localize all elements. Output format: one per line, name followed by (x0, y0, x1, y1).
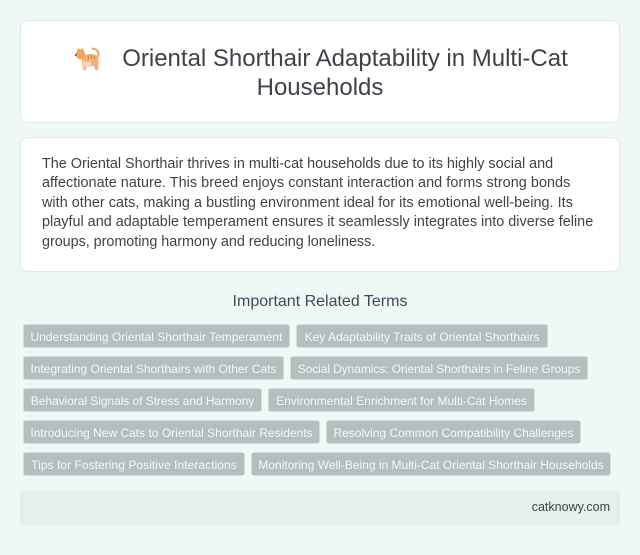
tags: related terms: Introducing New Cats to Oriental Shorthair Residents (30, 426, 313, 440)
tags: related terms: Understanding Oriental Shorthair Temperament (31, 330, 282, 344)
footer (20, 491, 620, 525)
text block: description: groups, promoting harmony and reducing loneliness. (42, 234, 375, 250)
panel: description (20, 137, 620, 272)
text block: description: The Oriental Shorthair thrives in multi-cat households due to its highly social and (42, 156, 553, 172)
tags: related terms (23, 324, 611, 476)
title (122, 45, 568, 101)
text block: description: with other cats, making a bustling environment ideal for its emotional well-being. Its (42, 195, 573, 211)
tags: related terms: Monitoring Well-Being in Multi-Cat Oriental Shorthair Households (258, 458, 604, 472)
tags: related terms: Key Adaptability Traits of Oriental Shorthairs (305, 330, 539, 344)
tags: related terms: Tips for Fostering Positive Interactions (31, 458, 237, 472)
text block: description: playful and adaptable temperament ensures it seamlessly integrates into diverse feline (42, 214, 593, 230)
tags: related terms: Social Dynamics: Oriental Shorthairs in Feline Groups (298, 362, 580, 376)
text block: description: affectionate nature. This breed enjoys constant interaction and forms strong bonds (42, 175, 570, 191)
title: Oriental Shorthair Adaptability in Multi-Cat (122, 45, 568, 72)
text block: description (42, 156, 593, 250)
tags: related terms: Environmental Enrichment for Multi-Cat Homes (276, 394, 527, 408)
icon: cat (74, 48, 100, 70)
tags: related terms: Behavioral Signals of Stress and Harmony (31, 394, 254, 408)
tags: related terms: Resolving Common Compatibility Challenges (333, 426, 574, 440)
heading: related terms: Important Related Terms (233, 293, 407, 310)
panel: title card (20, 20, 620, 123)
tags: related terms: Integrating Oriental Shorthairs with Other Cats (30, 362, 277, 376)
footer credit: catknowy.com (532, 500, 610, 514)
title: Households (257, 74, 383, 101)
